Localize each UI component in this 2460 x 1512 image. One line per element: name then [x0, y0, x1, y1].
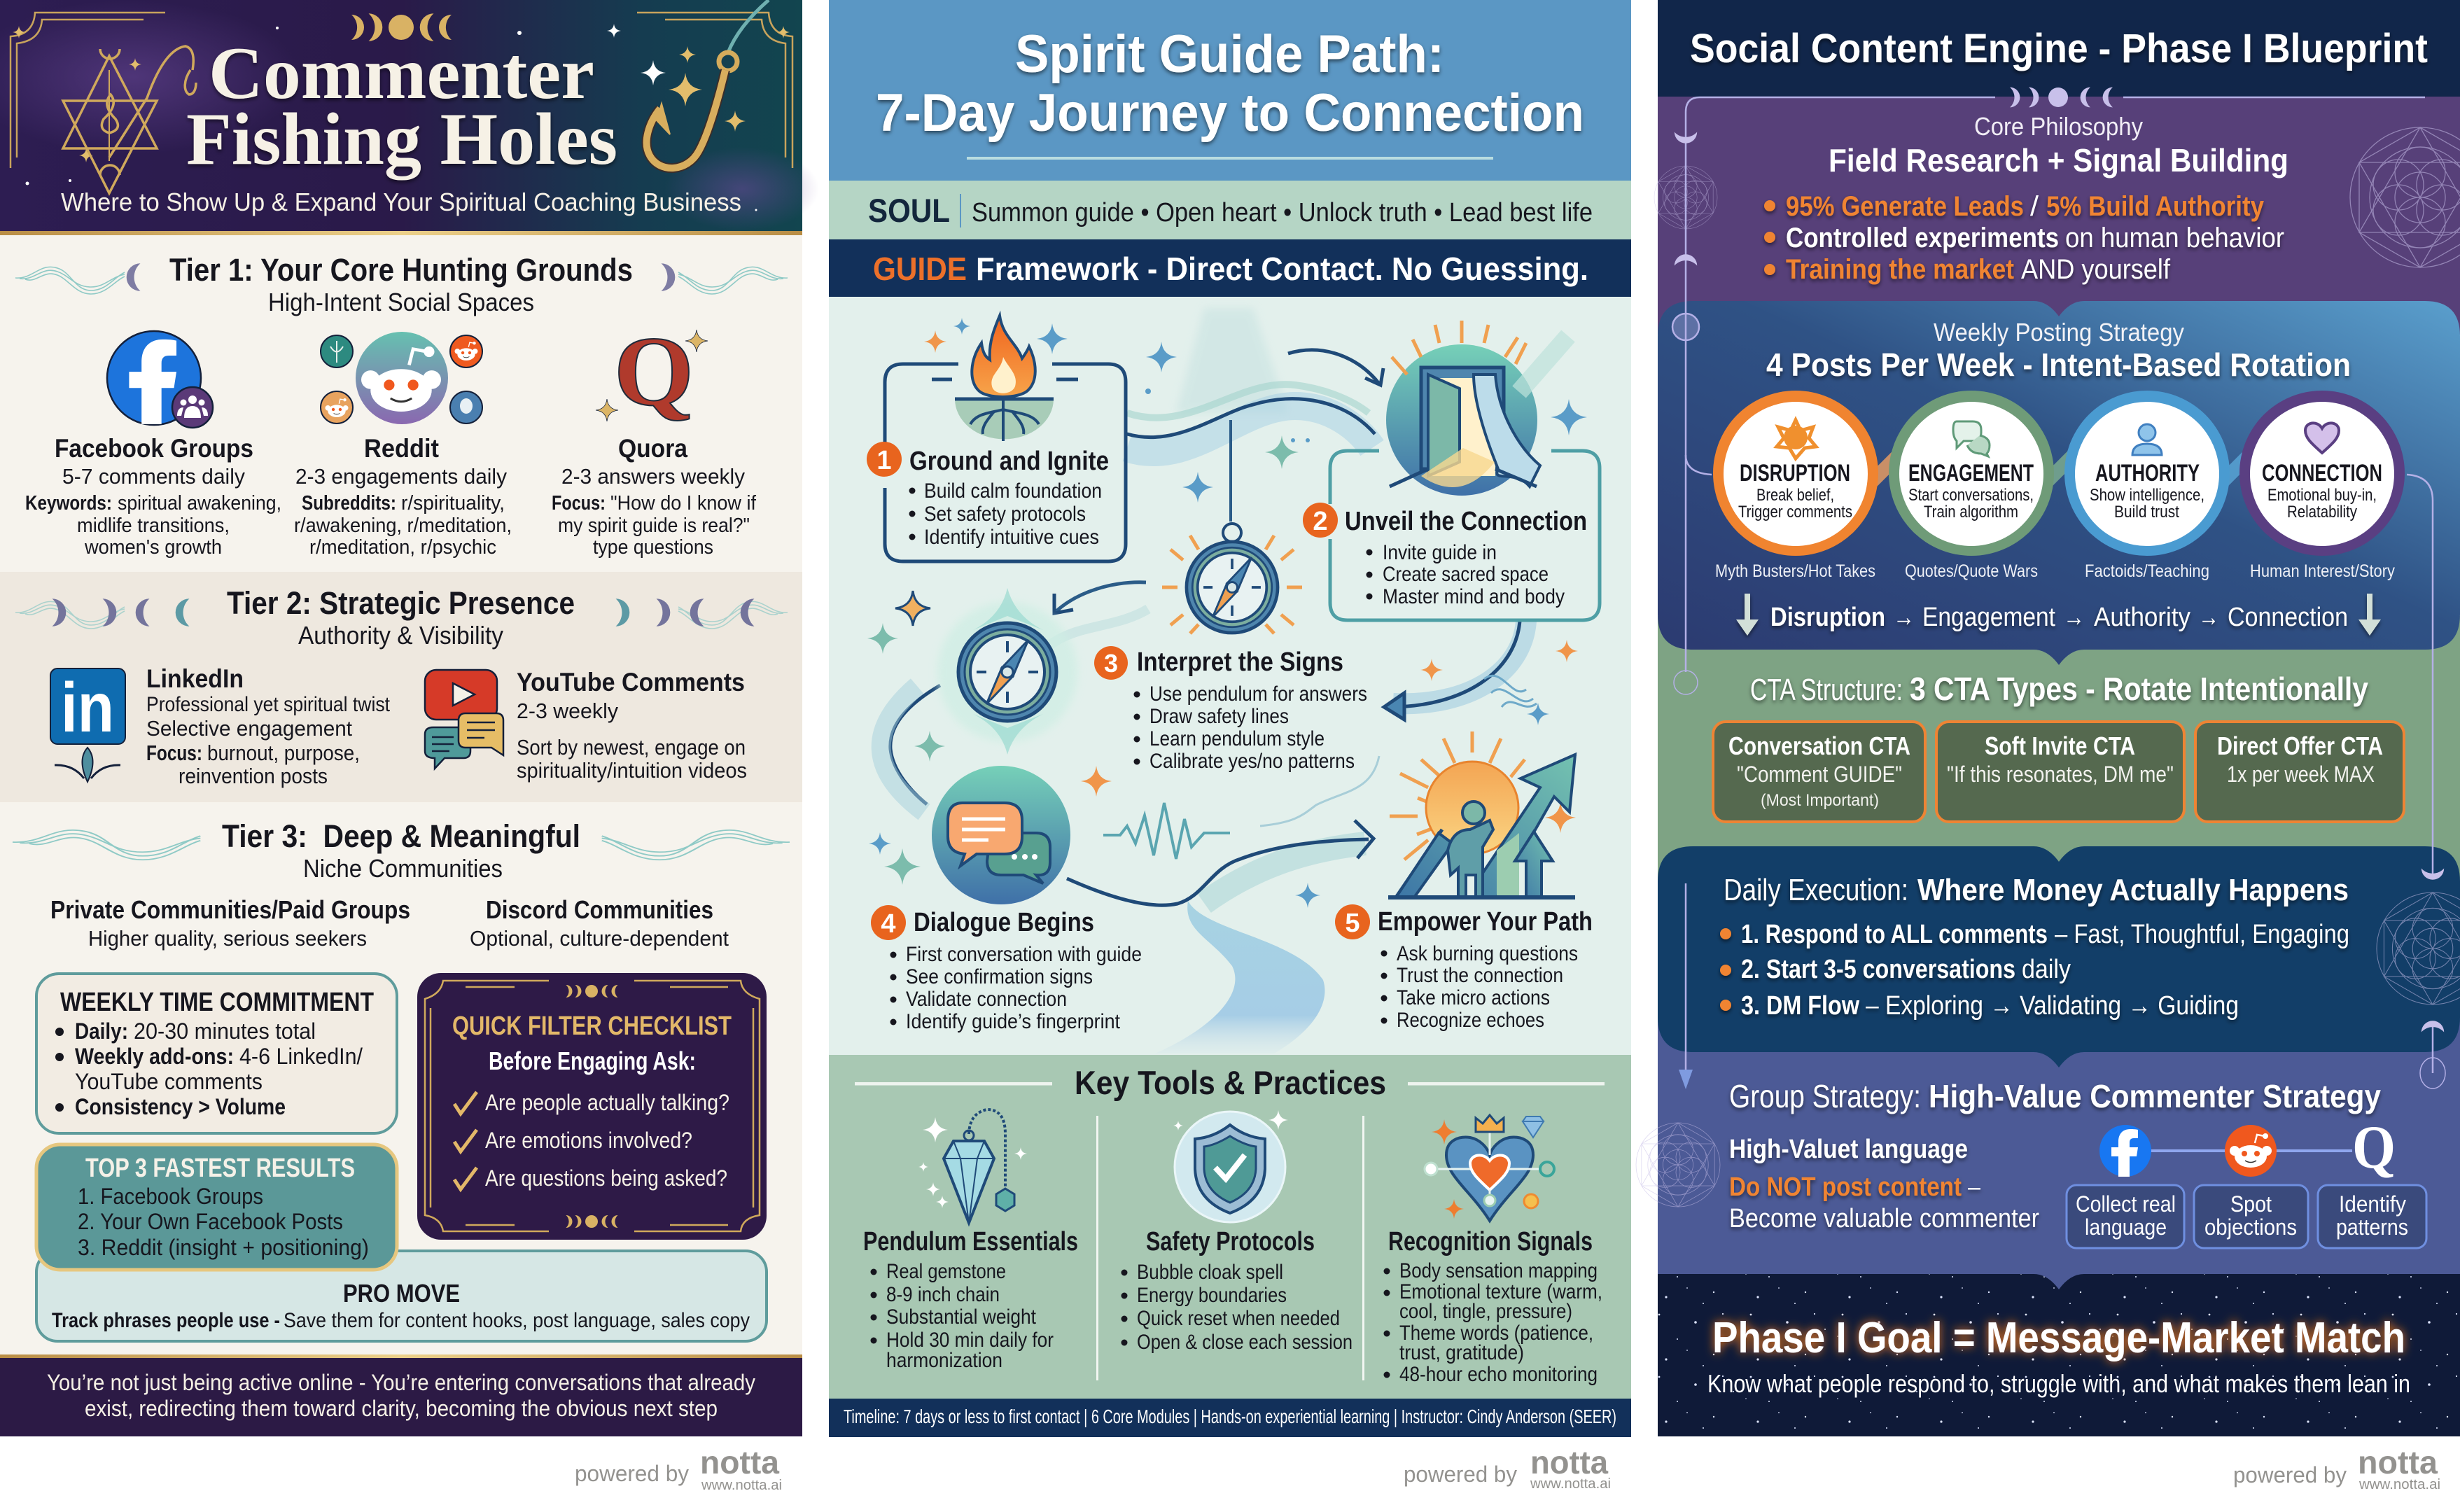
column: reddit: Reddit: [364, 434, 439, 463]
text: group strategy guidance: –: [1968, 1172, 1981, 1202]
step badge 1: [867, 442, 902, 477]
bullet list: daily execution: [1720, 920, 2349, 1021]
text: linkedin: reinvention posts: [179, 764, 328, 788]
card: weekly time commitment: WEEKLY TIME COMMITMENT: [60, 988, 374, 1017]
section: daily execution: [1658, 846, 2460, 1068]
rotation connector ring bands: [1871, 455, 2249, 483]
circle: engagement: [1889, 391, 2054, 556]
circle: engagement: Train algorithm: [1924, 503, 2018, 522]
section: green CTA background: [1658, 616, 2460, 882]
circle: authority: AUTHORITY: [2095, 460, 2200, 486]
card: quick filter checklist: QUICK FILTER CHECKLIST: [452, 1011, 732, 1041]
text: step 4: [890, 908, 1142, 1033]
icon: linkedin: [50, 668, 125, 782]
heading: tier 2: Tier 2: Strategic Presence: [227, 585, 575, 621]
text: community types: Discord Communities: [486, 895, 713, 924]
icon: facebook groups: [107, 331, 213, 428]
title: [186, 32, 617, 180]
section: tier 1: [15, 252, 788, 559]
icon: flame and roots: [955, 316, 1054, 441]
card: direct offer CTA: 1x per week MAX: [2227, 762, 2375, 787]
icon: youtube comments: [425, 670, 503, 769]
column: facebook groups: midlife transitions,: [77, 514, 230, 537]
step 3: interpret the signs: [937, 588, 1367, 773]
heading: tier 3: [222, 818, 580, 883]
card: top 3 fastest results: [36, 1144, 397, 1270]
text: group strategy guidance: [1729, 1135, 2039, 1233]
section: group strategy: High-Value Commenter Strategy: [1929, 1078, 2381, 1114]
text: youtube comments: Sort by newest, engage on: [517, 735, 746, 760]
section: core philosophy: Field Research + Signal Building: [1829, 142, 2288, 178]
bullet list: core philosophy: [1764, 191, 2284, 285]
bullet list: core philosophy: /: [2030, 191, 2039, 222]
text: step 5: Trust the connection: [1397, 964, 1563, 987]
circle: disruption: [1713, 391, 1878, 556]
column: safety protocols: Energy boundaries: [1137, 1284, 1287, 1307]
bullet list: daily execution: 2. Start 3-5 conversations: [1741, 955, 2015, 984]
card: top 3 fastest results: 2. Your Own Facebook Posts: [78, 1209, 343, 1234]
title: Fishing Holes: [186, 98, 617, 180]
step badge 3: 3: [1104, 649, 1118, 678]
card: weekly time commitment: Weekly add-ons:: [75, 1044, 234, 1069]
column: facebook groups: Facebook Groups: [55, 434, 253, 463]
card: pro move: Track phrases people use -: [52, 1309, 280, 1332]
content type labels: Myth Busters/Hot Takes: [1715, 561, 1875, 581]
icon: speech bubbles: [932, 766, 1070, 904]
icon: pendulum crystal: [918, 1110, 1027, 1223]
card: weekly time commitment: Daily:: [75, 1018, 128, 1044]
header: title: 7-Day Journey to Connection: [876, 83, 1584, 143]
card: quick filter checklist: Before Engaging Ask:: [489, 1046, 696, 1075]
bullet list: core philosophy: 5% Build Authority: [2046, 191, 2265, 222]
step 5: empower your path: [1335, 732, 1593, 1032]
card: collect real language: Collect real: [2076, 1191, 2176, 1217]
heading: tier 2: Authority & Visibility: [298, 621, 503, 650]
column: reddit: r/spirituality,: [401, 492, 505, 514]
text: linkedin: burnout, purpose,: [207, 741, 360, 765]
circle: connection: CONNECTION: [2262, 460, 2382, 486]
circle: connection: Emotional buy-in,: [2267, 486, 2377, 505]
column: safety protocols: [1121, 1227, 1353, 1354]
text: step 5: [1378, 907, 1593, 1032]
content type labels: Factoids/Teaching: [2085, 561, 2209, 581]
section: CTA structure: 3 CTA Types - Rotate Intentionally: [1910, 671, 2368, 707]
column: quora: Quora: [618, 434, 687, 463]
text: group strategy guidance: Become valuable commenter: [1729, 1204, 2039, 1233]
icon: sun, figure and rising arrow: [1388, 732, 1575, 897]
heading: tier 3: Tier 3: Deep & Meaningful: [222, 818, 580, 854]
text: youtube comments: YouTube Comments: [517, 668, 745, 696]
column: quora: my spirit guide is real?": [558, 514, 750, 537]
text: group strategy guidance: High-Valuet language: [1729, 1135, 1968, 1164]
step badge 2: [1303, 503, 1338, 538]
section: daily execution: Daily Execution:: [1724, 873, 1908, 907]
circle: authority: Show intelligence,: [2090, 486, 2204, 505]
text: community types: [50, 895, 729, 951]
text: step 3: Learn pendulum style: [1149, 727, 1325, 750]
content type labels: Quotes/Quote Wars: [1905, 561, 2038, 581]
icon: recognition heart: [1425, 1115, 1554, 1221]
column: recognition signals: [1383, 1227, 1602, 1386]
text: community types: Higher quality, serious seekers: [88, 926, 367, 951]
bullet list: core philosophy: on human behavior: [2065, 223, 2284, 253]
step badge 4: 4: [881, 909, 896, 939]
column: reddit: r/awakening, r/meditation,: [294, 514, 512, 537]
column: recognition signals: Body sensation mapping: [1399, 1259, 1598, 1282]
watermark: notta panel 1: powered by: [575, 1461, 689, 1486]
column: pendulum essentials: [863, 1227, 1078, 1372]
icon: fishing hook: [647, 0, 769, 168]
decoration: lavender frame lines and moons: [1672, 88, 2445, 1089]
section: weekly posting strategy: Weekly Posting Strategy: [1934, 318, 2184, 346]
section: tier 2: [0, 572, 802, 802]
card: spot objections: objections: [2204, 1214, 2297, 1240]
card: direct offer CTA: [2195, 722, 2404, 822]
column: recognition signals: 48-hour echo monitoring: [1399, 1363, 1598, 1386]
bullet list: core philosophy: Controlled experiments: [1786, 223, 2059, 253]
heading: tier 3: Niche Communities: [303, 854, 503, 883]
bullet list: daily execution: daily: [2022, 955, 2071, 984]
text: step 5: Take micro actions: [1397, 986, 1550, 1009]
column: pendulum essentials: Hold 30 min daily for: [886, 1329, 1054, 1352]
bullet list: core philosophy: 95% Generate Leads: [1786, 191, 2024, 222]
box outline step 1: [885, 364, 1126, 561]
text: youtube comments: [517, 668, 747, 783]
bullet list: daily execution: – Fast, Thoughtful, Engaging: [2055, 920, 2349, 949]
circle: authority: [2064, 391, 2230, 556]
card: soft invite CTA: "If this resonates, DM me": [1947, 762, 2174, 787]
heading: tier 1: High-Intent Social Spaces: [268, 288, 534, 316]
section: tier 3: [13, 818, 790, 1341]
card: conversation CTA: Conversation CTA: [1728, 732, 1910, 760]
watermark: notta panel 1: [575, 1444, 782, 1493]
card: weekly time commitment: [36, 974, 397, 1133]
column: safety protocols: Quick reset when needed: [1137, 1307, 1340, 1330]
card: spot objections: [2194, 1185, 2308, 1248]
card: identify patterns: patterns: [2336, 1214, 2408, 1240]
text: step 1: Set safety protocols: [924, 503, 1086, 526]
section: indigo background: [1658, 1008, 2460, 1302]
bullet list: core philosophy: AND yourself: [2021, 254, 2171, 285]
column: quora: "How do I know if: [610, 492, 757, 514]
column: pendulum essentials: 8-9 inch chain: [886, 1283, 1000, 1306]
section: weekly posting strategy: [1658, 301, 2460, 665]
band: SOUL acronym: [829, 181, 1631, 239]
column: recognition signals: Theme words (patience,: [1399, 1322, 1593, 1345]
text: community types: Optional, culture-dependent: [470, 926, 729, 951]
card: pro move: PRO MOVE: [343, 1279, 460, 1308]
content type labels: Human Interest/Story: [2250, 561, 2395, 581]
text: step 3: [1134, 648, 1367, 773]
card: top 3 fastest results: TOP 3 FASTEST RESULTS: [85, 1154, 355, 1183]
card: soft invite CTA: [1936, 722, 2184, 822]
section: core philosophy: Core Philosophy: [1974, 112, 2143, 141]
card: weekly time commitment: 4-6 LinkedIn/: [239, 1044, 363, 1069]
column: pendulum essentials: harmonization: [886, 1349, 1002, 1372]
icon: reddit small: [2225, 1125, 2277, 1177]
rotation flow line: →: [2063, 603, 2085, 632]
card: quick filter checklist: [417, 973, 767, 1240]
heading: key tools: Key Tools & Practices: [1075, 1064, 1386, 1101]
watermark: notta panel 3: [2233, 1444, 2440, 1492]
rotation flow line: →: [2198, 603, 2219, 632]
circle: connection: Relatability: [2287, 503, 2357, 522]
text: linkedin: Selective engagement: [146, 716, 352, 741]
column: facebook groups: women's growth: [84, 536, 222, 559]
watermark: notta panel 3: powered by: [2233, 1462, 2347, 1488]
watermark: notta panel 2: www.notta.ai: [1530, 1476, 1611, 1492]
section: daily execution: Where Money Actually Happens: [1917, 873, 2349, 907]
text: step 1: [909, 447, 1109, 549]
card: identify patterns: Identify: [2339, 1191, 2406, 1217]
watermark: notta panel 2: notta: [1530, 1444, 1608, 1480]
footer band: closing statement: exist, redirecting them toward clarity, becoming the obvious next step: [85, 1396, 718, 1421]
card: weekly time commitment: YouTube comments: [75, 1069, 263, 1094]
column: quora: [552, 434, 757, 559]
band: GUIDE framework: [829, 239, 1631, 297]
card: conversation CTA: (Most Important): [1761, 791, 1879, 810]
section: CTA structure: [1713, 671, 2404, 822]
text: step 5: Empower Your Path: [1378, 907, 1593, 937]
circle: authority: Build trust: [2114, 503, 2179, 522]
section: key tools and practices: [829, 1055, 1631, 1399]
sparkles: journey area: [867, 318, 1587, 908]
text: step 5: Recognize echoes: [1397, 1009, 1544, 1032]
column: recognition signals: cool, tingle, pressure): [1399, 1300, 1572, 1323]
text: step 5: Ask burning questions: [1397, 942, 1578, 965]
text: linkedin: Focus:: [146, 741, 202, 765]
text: step 3: Use pendulum for answers: [1149, 682, 1367, 706]
circle: disruption: Break belief,: [1756, 486, 1834, 505]
bullet list: daily execution: – Exploring → Validating → Guiding: [1866, 991, 2239, 1021]
column: recognition signals: trust, gratitude): [1399, 1341, 1524, 1364]
icon: facebook small: [2099, 1125, 2151, 1177]
card: top 3 fastest results: 1. Facebook Groups: [78, 1184, 263, 1209]
card: quick filter checklist: Are emotions involved?: [485, 1128, 692, 1153]
text: step 2: Invite guide in: [1383, 541, 1497, 564]
rotation flow line: Engagement: [1922, 603, 2055, 632]
watermark: notta panel 2: [1404, 1444, 1611, 1492]
rotation flow line: →: [1893, 603, 1915, 632]
decoration: tier 2 moons and waves: [15, 598, 788, 629]
band: GUIDE framework: GUIDE: [873, 251, 967, 287]
column: recognition signals: Recognition Signals: [1388, 1227, 1593, 1256]
card: collect real language: language: [2085, 1214, 2167, 1240]
icon: quora small: Q: [2352, 1114, 2396, 1182]
card: weekly time commitment: Consistency > Volume: [75, 1094, 286, 1119]
text: step 3: Draw safety lines: [1149, 705, 1289, 728]
decoration: tier 3 waves: [13, 830, 790, 860]
card: soft invite CTA: Soft Invite CTA: [1985, 732, 2135, 760]
panel: Spirit Guide Path: [829, 0, 1631, 1437]
step badge 5: 5: [1345, 909, 1360, 938]
step 2: unveil the connection: [1303, 321, 1600, 620]
icon: reddit: [321, 332, 482, 424]
column: facebook groups: spiritual awakening,: [118, 492, 281, 514]
icon: mystic star emblem with rod: [63, 46, 196, 193]
decoration: tier 1 waves: [15, 263, 788, 294]
step 4: dialogue begins: [871, 766, 1142, 1033]
text: step 4: Dialogue Begins: [914, 908, 1094, 937]
watermark: notta panel 1: www.notta.ai: [701, 1478, 782, 1493]
watermark: notta panel 3: notta: [2358, 1444, 2438, 1480]
rotation flow line: Connection: [2228, 603, 2348, 632]
box outline step 2: [1330, 451, 1600, 620]
header: title: Spirit Guide Path:: [1015, 24, 1444, 84]
column: pendulum essentials: Pendulum Essentials: [863, 1227, 1078, 1256]
column: reddit: 2-3 engagements daily: [295, 464, 507, 489]
footer band: timeline: [829, 1399, 1631, 1437]
step badge 5: [1335, 904, 1370, 939]
section: Phase I goal: [1658, 1274, 2460, 1436]
text: community types: Private Communities/Paid Groups: [50, 895, 410, 924]
column: quora: Focus:: [552, 492, 606, 514]
text: youtube comments: spirituality/intuition videos: [517, 758, 747, 783]
icon: pendulum compass: [1162, 524, 1302, 634]
panel: Commenter Fishing Holes: [0, 0, 819, 1436]
heading: key tools: [855, 1064, 1605, 1101]
column: facebook groups: Keywords:: [25, 492, 112, 514]
bullet list: daily execution: 3. DM Flow: [1741, 991, 1859, 1021]
watermark: notta panel 2: powered by: [1404, 1462, 1517, 1487]
header: title: [829, 0, 1631, 181]
text: group strategy guidance: Do NOT post content: [1729, 1172, 1962, 1202]
circle: disruption: Trigger comments: [1738, 503, 1852, 522]
column: facebook groups: [25, 434, 281, 559]
heading: tier 2: [227, 585, 575, 650]
section: weekly posting strategy: 4 Posts Per Week - Intent-Based Rotation: [1766, 346, 2351, 383]
text: step 2: Create sacred space: [1383, 563, 1549, 586]
band: GUIDE framework: Framework - Direct Contact. No Guessing.: [976, 251, 1588, 287]
text: linkedin: LinkedIn: [146, 664, 244, 693]
footer band: timeline: Timeline: 7 days or less to first contact | 6 Core Modules | Hands-on experiential learning | Instructor: Cindy Anderson (SEER): [844, 1406, 1616, 1427]
text: step 2: [1345, 507, 1587, 608]
journey path ribbons and arrows: [881, 308, 1537, 1054]
text: step 3: Calibrate yes/no patterns: [1149, 750, 1355, 773]
text: step 3: Interpret the Signs: [1137, 648, 1343, 677]
card: direct offer CTA: Direct Offer CTA: [2217, 732, 2383, 760]
watermark: notta panel 3: www.notta.ai: [2358, 1477, 2440, 1492]
icon: quora: [596, 316, 708, 426]
content type labels: [1715, 561, 2395, 581]
panel: Social Content Engine: [1636, 0, 2460, 1436]
text: step 1: Build calm foundation: [924, 479, 1102, 503]
column: safety protocols: Bubble cloak spell: [1137, 1261, 1283, 1284]
column: pendulum essentials: Real gemstone: [886, 1260, 1006, 1283]
bullet list: daily execution: 1. Respond to ALL comments: [1741, 920, 2048, 949]
heading: tier 1: [169, 252, 633, 316]
step badge 3: [1094, 646, 1128, 680]
card: top 3 fastest results: 3. Reddit (insight + positioning): [78, 1235, 369, 1260]
text: linkedin: Professional yet spiritual twist: [146, 693, 391, 716]
icon: safety shield: [1173, 1110, 1288, 1222]
rotation flow line: [1736, 594, 2381, 636]
card: spot objections: Spot: [2230, 1191, 2272, 1217]
icon: open door: [1386, 321, 1568, 496]
bullet list: core philosophy: Training the market: [1786, 254, 2014, 285]
card: conversation CTA: [1713, 722, 1925, 822]
section: core philosophy: [1654, 97, 2460, 335]
card: pro move: [36, 1251, 767, 1341]
text: step 4: Identify guide’s fingerprint: [906, 1010, 1121, 1033]
step badge 2: 2: [1313, 507, 1328, 536]
header: title: [1658, 0, 2460, 98]
text: step 1: Identify intuitive cues: [924, 526, 1099, 549]
circle: connection: [2239, 391, 2405, 556]
column: recognition signals: Emotional texture (warm,: [1399, 1280, 1602, 1303]
column: pendulum essentials: Substantial weight: [886, 1306, 1037, 1329]
text: linkedin: [146, 664, 391, 788]
column: reddit: r/meditation, r/psychic: [309, 536, 496, 559]
section: CTA structure: CTA Structure:: [1750, 673, 1903, 707]
step badge 4: [871, 905, 906, 940]
icon: linkedin: in: [61, 668, 114, 747]
band: SOUL acronym: SOUL: [868, 192, 950, 229]
card: collect real language: [2067, 1185, 2184, 1248]
rotation flow line: Authority: [2094, 603, 2190, 632]
subtitle: Where to Show Up & Expand Your Spiritual Coaching Business: [61, 188, 741, 216]
footer band: closing statement: [0, 1354, 802, 1436]
icon: large compass with glow: [937, 588, 1077, 755]
header banner: [0, 0, 819, 235]
band: SOUL acronym: Summon guide • Open heart • Unlock truth • Lead best life: [972, 198, 1593, 227]
text: step 2: Unveil the Connection: [1345, 507, 1587, 536]
rotation flow line: Disruption: [1770, 603, 1885, 632]
column: quora: 2-3 answers weekly: [561, 464, 745, 489]
section: group strategy: [1636, 1078, 2426, 1248]
column: reddit: [294, 434, 512, 559]
title: Commenter: [209, 32, 594, 114]
column: reddit: Subreddits:: [302, 492, 396, 514]
text: step 4: Validate connection: [906, 988, 1067, 1011]
section: group strategy: Group Strategy:: [1729, 1078, 1921, 1114]
text: step 2: Master mind and body: [1383, 585, 1565, 608]
card: weekly time commitment: 20-30 minutes total: [134, 1018, 316, 1044]
column: safety protocols: Safety Protocols: [1146, 1227, 1315, 1256]
column: safety protocols: Open & close each session: [1137, 1331, 1353, 1354]
circle: engagement: ENGAGEMENT: [1908, 460, 2034, 486]
card: quick filter checklist: Are people actually talking?: [485, 1090, 729, 1115]
card: conversation CTA: "Comment GUIDE": [1737, 762, 1902, 787]
circle: engagement: Start conversations,: [1908, 486, 2034, 505]
card: identify patterns: [2318, 1185, 2426, 1248]
column: quora: type questions: [593, 536, 713, 559]
footer band: closing statement: You’re not just being active online - You’re entering conversations that already: [47, 1370, 755, 1395]
step badge 1: 1: [876, 446, 892, 475]
column: facebook groups: 5-7 comments daily: [62, 464, 245, 489]
text: step 4: See confirmation signs: [906, 965, 1093, 988]
icon: quora: Q: [614, 316, 694, 426]
card: quick filter checklist: Are questions being asked?: [485, 1166, 727, 1191]
heading: tier 1: Tier 1: Your Core Hunting Grounds: [169, 252, 633, 288]
text: youtube comments: 2-3 weekly: [517, 699, 618, 723]
watermark: notta panel 1: notta: [700, 1444, 779, 1480]
icon: moon phases: [351, 13, 452, 41]
text: step 1: Ground and Ignite: [909, 447, 1109, 476]
step 1: ground and ignite: [867, 316, 1126, 561]
circle: disruption: DISRUPTION: [1740, 460, 1850, 486]
card: pro move: Save them for content hooks, post language, sales copy: [284, 1309, 750, 1332]
text: step 4: First conversation with guide: [906, 943, 1142, 966]
